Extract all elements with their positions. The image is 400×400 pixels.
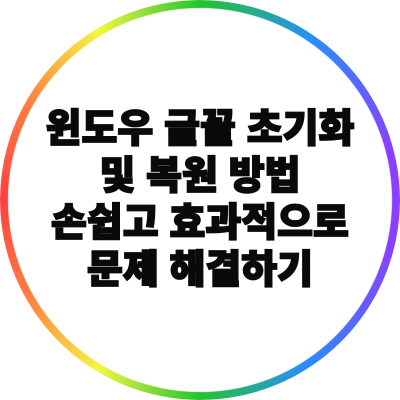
title: 문제 해결하기: [87, 249, 313, 292]
title: 윈도우 글꼴 초기화: [46, 108, 354, 151]
title: [46, 108, 354, 292]
title: 및 복원 방법: [99, 155, 301, 198]
title: 손쉽고 효과적으로: [51, 202, 349, 245]
